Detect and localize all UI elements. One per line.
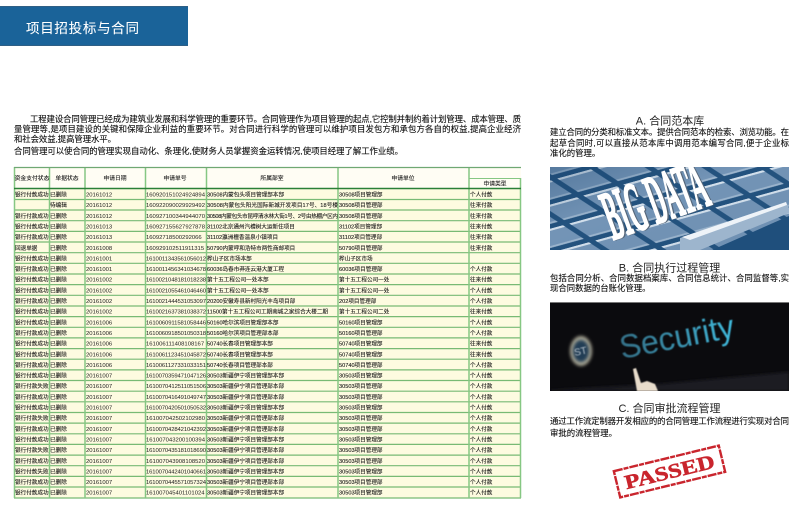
table body rows: 20161001	[86, 267, 112, 273]
table header row: 申请日期	[103, 174, 127, 182]
section A heading: A. 合同范本库	[636, 114, 704, 128]
table body rows: 30503项目管理部	[339, 489, 383, 497]
table body rows: 20161007	[86, 491, 112, 497]
table body rows: 已删除	[50, 425, 67, 433]
table body rows: 已删除	[50, 446, 67, 454]
table body rows: 个人付款	[470, 265, 493, 273]
table body rows: 银行付款成功	[15, 212, 49, 220]
table body rows: 20161002	[86, 278, 112, 284]
table body rows: 20161007	[86, 374, 112, 380]
intro text block: 量管理等,是项目建设的关键和保障企业利益的重要环节。对合同进行科学的管理可以维护项目发包方和承包方各自的权益,提高企业经济	[14, 124, 522, 134]
table body rows: 银行付款失败	[15, 446, 49, 454]
table body rows: 1610061127331033151	[146, 363, 206, 369]
table body rows: 31102项目管理部	[339, 233, 383, 241]
intro text block: 工程建设合同管理已经成为建筑业发展和科学管理的重要环节。合同管理作为项目管理的起点,它控制并制约着计划管理、成本管理、质	[30, 114, 521, 124]
table body rows: 30503新疆伊宁项目管理部本部	[207, 457, 284, 465]
table body rows: 1610011456341034678	[146, 267, 207, 273]
table body rows: 已删除	[50, 436, 67, 444]
table body rows: 20161007	[86, 469, 112, 475]
table body rows: 个人付款	[470, 425, 493, 433]
table header row: 所属部室	[260, 174, 284, 182]
table body rows: 20161006	[86, 320, 113, 326]
section B heading: B. 合同执行过程管理	[619, 260, 720, 274]
table body rows: 161007043908108520	[146, 459, 206, 465]
table body rows: 个人付款	[470, 414, 493, 422]
table header row	[15, 174, 507, 188]
table body rows: 30508项目管理部	[339, 201, 383, 209]
table body rows: 30503新疆伊宁项目管理部本部	[207, 489, 284, 497]
table body rows: 银行付款成功	[15, 286, 49, 294]
table body rows: 1610070412511051506	[146, 384, 207, 390]
table body rows: 个人付款	[470, 393, 493, 401]
table body rows: 往来付款	[470, 233, 493, 241]
table body rows: 银行付款成功	[15, 457, 49, 465]
table body rows: 1610021055461046460	[146, 288, 207, 294]
table body rows: 161007043200100394	[146, 438, 206, 444]
section C text	[550, 416, 789, 438]
table body rows: 银行付款成功	[15, 254, 49, 262]
table body rows: 已删除	[50, 329, 67, 337]
table body rows: 30503项目管理部	[339, 404, 383, 412]
image: security screen: Security	[616, 307, 738, 366]
table body rows: 30503新疆伊宁项目管理部本部	[207, 425, 284, 433]
table body rows: 20161007	[86, 395, 112, 401]
table body rows: 银行付款成功	[15, 361, 49, 369]
table body rows: 30503项目管理部	[339, 467, 383, 475]
table body rows: 30503项目管理部	[339, 436, 383, 444]
table body rows: 已删除	[50, 414, 67, 422]
table body rows: 个人付款	[470, 190, 493, 198]
table body rows: 160927155627927878	[146, 224, 206, 230]
table body rows: 已删除	[50, 489, 67, 497]
table body rows: 20161006	[86, 363, 113, 369]
table body rows: 1610061123451045872	[146, 352, 206, 358]
table body rows: 银行付款成功	[15, 404, 49, 412]
table body rows: 1610011343561056012	[146, 256, 206, 262]
table body rows: 银行付款成功	[15, 233, 49, 241]
table body rows: 往来付款	[470, 276, 493, 284]
table body rows: 回退单据	[15, 244, 38, 252]
table body rows: 往来付款	[470, 308, 493, 316]
table body rows: 已删除	[50, 350, 67, 358]
table body rows: 第十五工程公司一处本部	[207, 276, 269, 284]
table body rows: 1610021048181018238	[146, 278, 207, 284]
table body rows: 30503新疆伊宁项目管理部本部	[207, 404, 284, 412]
table body rows: 已删除	[50, 308, 67, 316]
table body rows: 已删除	[50, 286, 67, 294]
table body rows: 1610060911581058446	[146, 320, 207, 326]
section C heading: C. 合同审批流程管理	[618, 401, 721, 415]
table body rows: 30508项目管理部	[339, 190, 383, 198]
table body rows: 银行付款成功	[15, 489, 49, 497]
table body rows: 已删除	[50, 212, 67, 220]
table body rows: 已删除	[50, 297, 67, 305]
table body rows: 30503新疆伊宁项目管理部本部	[207, 436, 284, 444]
section A text: 起草合同时,可以直接从范本库中调用范本编写合同,便于企业标	[550, 138, 790, 148]
table body rows: 已删除	[50, 265, 67, 273]
table body rows: 桦山子区市场本部	[207, 254, 252, 262]
table body rows: 50740长春项目管理部本部	[207, 350, 273, 358]
image: big data keyboard: BIG DATA	[593, 145, 720, 256]
table body rows: 20161007	[86, 384, 112, 390]
table body rows: 50740项目管理部	[339, 340, 383, 348]
table body rows: 20161006	[86, 352, 113, 358]
section A text: 建立合同的分类和标准文本。提供合同范本的检索、浏览功能。在	[550, 127, 789, 137]
table body rows: 20161007	[86, 459, 112, 465]
section B text: 现合同数据的台账化管理。	[550, 283, 650, 293]
table body rows: 银行付款失败	[15, 414, 49, 422]
table body rows: 30503项目管理部	[339, 414, 383, 422]
table body rows: 30503新疆伊宁项目管理部本部	[207, 414, 284, 422]
table body rows: 202项目管理部	[339, 297, 377, 305]
table body rows: 个人付款	[470, 478, 493, 486]
table body rows: 已删除	[50, 340, 67, 348]
intro text block: 合同管理可以使合同的管理实现自动化、条理化,使财务人员掌握资金运转情况,使项目经理了解工作业绩。	[14, 146, 403, 156]
table body rows: 第十五工程公司二处	[339, 308, 390, 316]
table body rows: 20161002	[86, 288, 112, 294]
table body rows: 20161007	[86, 448, 112, 454]
section A text	[550, 127, 790, 158]
table body rows: 银行付款成功	[15, 425, 49, 433]
table header row: 申请单位	[391, 174, 415, 182]
table body rows: 50740项目管理部	[339, 350, 383, 358]
table header row: 单据状态	[55, 174, 79, 182]
table body rows: 已删除	[50, 467, 67, 475]
table body rows: 160920151024924894	[146, 192, 206, 198]
table body rows: 桦山子区市场	[339, 254, 373, 262]
intro text block	[14, 114, 522, 156]
table body rows: 160927100344944070	[146, 214, 206, 220]
table body rows: 50790内蒙呼和浩特市两性商邮项目	[207, 244, 295, 252]
table body rows: 已删除	[50, 233, 67, 241]
table body rows: 已删除	[50, 404, 67, 412]
table body rows: 1610021444531053097	[146, 299, 206, 305]
table body rows: 20161002	[86, 299, 112, 305]
table body rows: 50160哈尔滨项目管理部本部	[207, 318, 279, 326]
table body rows: 60036岛春市莽连云港大厦工程	[207, 265, 284, 273]
table body rows: 第十五工程公司一处本部	[207, 286, 269, 294]
table body rows: 已删除	[50, 361, 67, 369]
table body rows: 30503新疆伊宁项目管理部本部	[207, 446, 284, 454]
table body rows: 银行付款成功	[15, 372, 49, 380]
table body rows: 60036项目管理部	[339, 265, 383, 273]
table body rows: 30503新疆伊宁项目管理部本部	[207, 382, 284, 390]
table body rows: 个人付款	[470, 467, 493, 475]
table body rows: 20161007	[86, 416, 112, 422]
table body rows: 30503项目管理部	[339, 457, 383, 465]
table body rows: 银行付款成功	[15, 276, 49, 284]
table body rows: 30508内蒙包头市昆呼清水林大街1号、2号由热棚户区内	[207, 212, 338, 220]
table body rows: 16092718500292066	[146, 235, 202, 241]
table body rows: 个人付款	[470, 436, 493, 444]
table body rows: 银行付款失败	[15, 382, 49, 390]
image: big data keyboard	[550, 167, 789, 250]
table body rows: 已删除	[50, 254, 67, 262]
table body rows: 1610070420501050532	[146, 406, 206, 412]
table body rows: 已删除	[50, 478, 67, 486]
table body rows: 20161007	[86, 427, 112, 433]
table body rows: 50740长春项目管理部本部	[207, 340, 273, 348]
table body rows: 31102瀛洲檀香温泉小镇项目	[207, 233, 278, 241]
table body rows: 已删除	[50, 222, 67, 230]
table body rows: 50160项目管理部	[339, 318, 383, 326]
table body rows: 30503项目管理部	[339, 425, 383, 433]
table body rows: 161006111408108167	[146, 342, 204, 348]
table body rows: 20161006	[86, 331, 113, 337]
table body rows: 1610070435181018690	[146, 448, 207, 454]
stamp: passed: PASSED	[622, 451, 717, 494]
table body rows: 往来付款	[470, 350, 493, 358]
table body rows: 银行付款成功	[15, 318, 49, 326]
table body rows: 银行付款成功	[15, 308, 49, 316]
table body rows: 已删除	[50, 244, 67, 252]
table body rows: 50160哈尔滨项目管理部本部	[207, 329, 279, 337]
table body rows: 31102北京通州汽槽树大运新住项目	[207, 222, 295, 230]
table body rows: 20161008	[86, 246, 113, 252]
table body rows: 31102项目管理部	[339, 222, 383, 230]
table body rows: 30503新疆伊宁项目管理部本部	[207, 372, 284, 380]
table body rows: 已删除	[50, 382, 67, 390]
table body rows: 20200安徽寿县新村阳光丰岛项目部	[207, 297, 296, 305]
table body rows: 银行付款成功	[15, 329, 49, 337]
table body rows: 已删除	[50, 393, 67, 401]
table body rows: 银行付款成功	[15, 340, 49, 348]
intro text block: 和社会效益,提高管理水平。	[14, 134, 116, 144]
table body rows: 个人付款	[470, 457, 493, 465]
table body rows: 20161012	[86, 203, 112, 209]
table body rows: 个人付款	[470, 489, 493, 497]
table body rows: 往来付款	[470, 212, 493, 220]
table body rows: 1610021637381038372	[146, 310, 206, 316]
section C text: 审批的流程管理。	[550, 428, 617, 438]
table body rows: 银行付款成功	[15, 393, 49, 401]
table body rows: 个人付款	[470, 286, 493, 294]
table body rows: 160929102511911315	[146, 246, 205, 252]
table body rows: 个人付款	[470, 361, 493, 369]
table body rows: 50790项目管理部	[339, 244, 383, 252]
table body rows: 银行付款成功	[15, 297, 49, 305]
table body rows: 银行付款成功	[15, 190, 49, 198]
table body rows: 个人付款	[470, 329, 493, 337]
table body rows: 银行付款失败	[15, 467, 49, 475]
table body rows: 银行付款成功	[15, 350, 49, 358]
table body rows: 个人付款	[470, 372, 493, 380]
table body rows: 个人付款	[470, 318, 493, 326]
table body rows: 50740项目管理部	[339, 361, 383, 369]
table header row: 申请单号	[163, 174, 187, 182]
table body rows: 往来付款	[470, 244, 493, 252]
table body rows: 往来付款	[470, 340, 493, 348]
table body rows: 161007042502102980	[146, 416, 206, 422]
table body rows: 已删除	[50, 318, 67, 326]
table body rows: 50740长春项目管理部本部	[207, 361, 273, 369]
table body rows: 20161012	[86, 192, 112, 198]
table body rows: 161007045401101024	[146, 491, 205, 497]
table body rows: 第十五工程公司一处	[339, 276, 390, 284]
table body rows: 11500第十五工程公司工期南城之家综合大楼二期	[207, 308, 328, 316]
table body rows: 30503新疆伊宁项目管理部本部	[207, 393, 284, 401]
table body rows: 30508内蒙包头项目管理部本部	[207, 190, 284, 198]
section C text: 通过工作流定制器开发相应的的合同管理工作流程进行实现对合同	[550, 416, 789, 426]
table body rows: 30503项目管理部	[339, 382, 383, 390]
table body rows: 银行付款成功	[15, 478, 49, 486]
table body rows: 30503新疆伊宁项目管理部本部	[207, 478, 284, 486]
table body rows: 银行付款成功	[15, 265, 49, 273]
section A text: 准化的管理。	[550, 148, 600, 158]
table body rows: 20161006	[86, 342, 113, 348]
section B text: 包括合同分析、合同数据档案库、合同信息统计、合同监督等,实	[550, 273, 789, 283]
table body rows: 往来付款	[470, 201, 493, 209]
table body rows: 30503项目管理部	[339, 478, 383, 486]
table body rows: 待编辑	[50, 201, 67, 209]
table body rows: 20161013	[86, 224, 113, 230]
table body rows: 已删除	[50, 457, 67, 465]
table header row: 申请类型	[483, 180, 507, 188]
table body rows: 1610070442401040661	[146, 469, 206, 475]
table body rows: 20161007	[86, 480, 112, 486]
image: security screen: ST	[573, 346, 588, 359]
table body rows: 20161007	[86, 438, 112, 444]
table body rows: 20161002	[86, 310, 112, 316]
table body rows	[15, 190, 493, 497]
table body rows: 30503新疆伊宁项目管理部本部	[207, 467, 284, 475]
table body rows: 个人付款	[470, 446, 493, 454]
table body rows: 已删除	[50, 276, 67, 284]
table body rows: 30503项目管理部	[339, 372, 383, 380]
table body rows: 30508内蒙包头阳光国际新城开发项目17号、18号楼	[207, 201, 338, 209]
section B text	[550, 273, 789, 293]
table body rows: 往来付款	[470, 222, 493, 230]
stamp: passed	[614, 446, 725, 497]
table body rows: 个人付款	[470, 404, 493, 412]
table body rows: 已删除	[50, 372, 67, 380]
contract data table	[14, 167, 521, 498]
table body rows: 1610070445571057324	[146, 480, 207, 486]
table header row: 资金支付状态	[15, 174, 50, 182]
table body rows: 20161007	[86, 406, 112, 412]
table body rows: 已删除	[50, 190, 67, 198]
table body rows: 1610070428421042392	[146, 427, 206, 433]
table body rows: 个人付款	[470, 297, 493, 305]
title banner: 项目招投标与合同	[26, 21, 139, 36]
image: security screen	[550, 302, 789, 391]
table body rows: 50160项目管理部	[339, 329, 383, 337]
table body rows: 30503项目管理部	[339, 446, 383, 454]
table body rows: 银行付款成功	[15, 222, 49, 230]
table body rows: 30503项目管理部	[339, 393, 383, 401]
table body rows: 1610060918501050318	[146, 331, 207, 337]
table body rows: 1610070416491049747	[146, 395, 206, 401]
table body rows: 银行付款成功	[15, 436, 49, 444]
table body rows: 第十五工程公司一处	[339, 286, 390, 294]
title banner	[0, 6, 188, 46]
table body rows: 1610070359471047126	[146, 374, 207, 380]
image: big data keyboard: BIG DATA	[591, 144, 718, 255]
table body rows: 20161013	[86, 235, 113, 241]
table body rows: 20161012	[86, 214, 112, 220]
table body rows: 20161001	[86, 256, 112, 262]
table body rows: 30508项目管理部	[339, 212, 383, 220]
table body rows: 160922090029929492	[146, 203, 205, 209]
table body rows: 个人付款	[470, 382, 493, 390]
